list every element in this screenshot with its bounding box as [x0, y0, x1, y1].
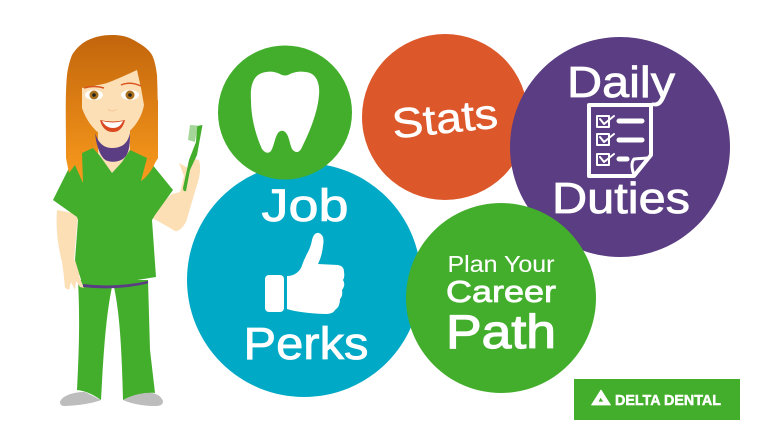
- right arm and hand: [152, 158, 200, 231]
- illustration: dentist character: [53, 35, 202, 406]
- panel: plan your career path: [406, 203, 596, 393]
- text: Delta Dental: DELTA DENTAL: [615, 392, 721, 409]
- heading: Perks: Perks: [244, 318, 368, 369]
- hair strands front: [66, 100, 158, 183]
- icon: thumbs up: [265, 233, 344, 314]
- shirt: [53, 148, 173, 283]
- neck: [98, 125, 130, 173]
- text: Plan Your: Plan Your: [448, 251, 555, 277]
- left arm and hand: [57, 210, 88, 290]
- panel: job perks: [187, 163, 421, 397]
- face: [82, 70, 144, 139]
- belt: [83, 281, 148, 288]
- text: Career: Career: [446, 274, 556, 309]
- text: Path: Path: [446, 305, 556, 358]
- shoes: [60, 392, 163, 406]
- heading: Daily: Daily: [567, 58, 675, 107]
- icon: checklist: [589, 105, 651, 176]
- eyebrows: [84, 83, 141, 88]
- logo: Delta Dental: [574, 379, 740, 420]
- heading: Duties: Duties: [552, 174, 690, 223]
- eyes: [85, 90, 103, 100]
- hair back: [66, 35, 158, 165]
- toothbrush: [183, 125, 202, 191]
- nose: [108, 109, 117, 111]
- icon: tooth: [251, 72, 319, 153]
- mouth: [100, 120, 125, 132]
- icon: delta triangle: [592, 390, 610, 405]
- panel: tooth: [218, 46, 352, 180]
- heading: Job: Job: [262, 180, 348, 231]
- panel: stats: [362, 34, 528, 200]
- pants: [77, 280, 155, 400]
- heading: Stats: Stats: [390, 90, 500, 147]
- bristles: [188, 125, 198, 142]
- choker: [95, 133, 130, 162]
- panel: daily duties: [510, 37, 730, 257]
